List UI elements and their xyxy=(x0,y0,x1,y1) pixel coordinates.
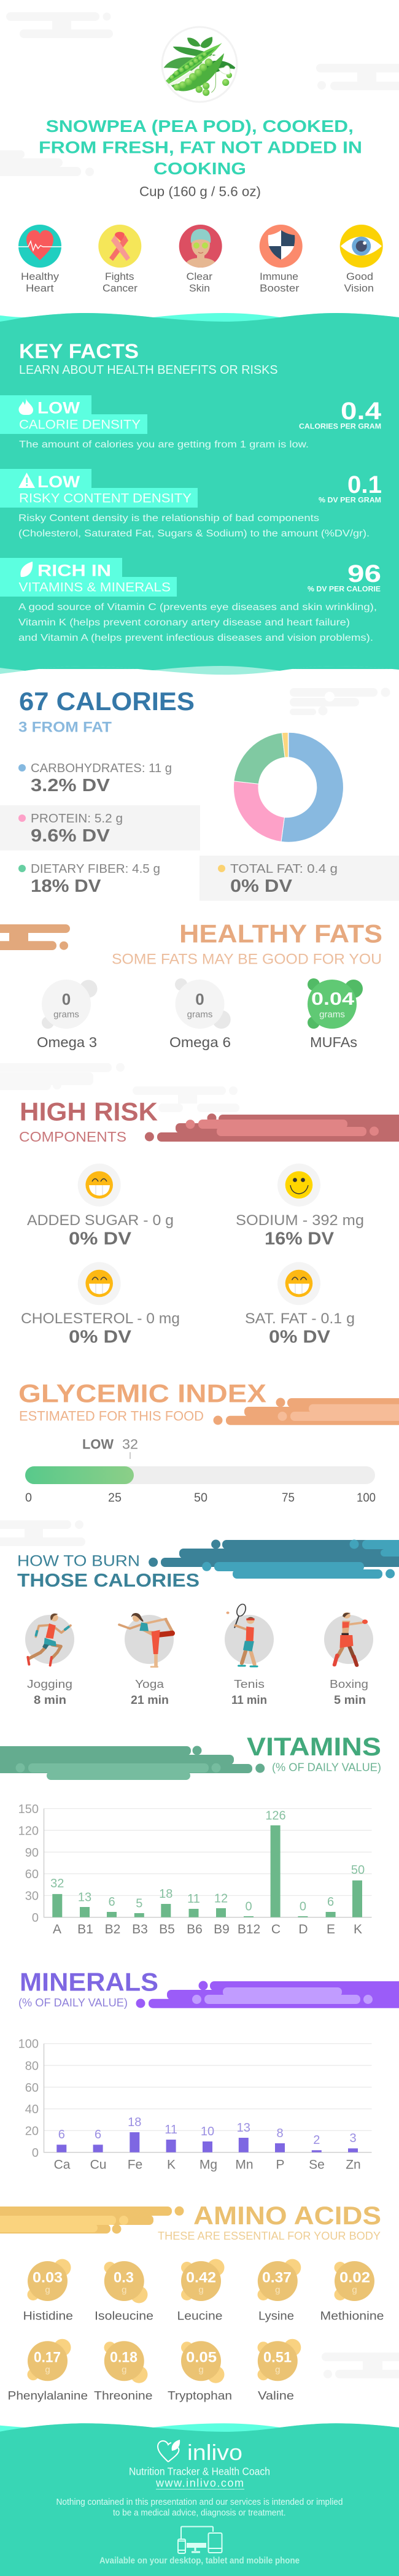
fact: low calorie density: 0.4 xyxy=(341,398,382,425)
amino: lysine: 0.37 xyxy=(262,2269,292,2286)
bar chart: vitamins: K xyxy=(354,1922,362,1936)
amino: leucine: g xyxy=(198,2285,204,2296)
background cloud: amino xyxy=(322,2353,399,2378)
value: low 32: LOW xyxy=(82,1437,114,1452)
bar chart: vitamins: B6 xyxy=(187,1922,203,1936)
stat: dietary fiber xyxy=(18,862,160,896)
heading: how to burn those calories: HOW TO BURN xyxy=(17,1553,140,1570)
amino: phenylalanine: Phenylalanine xyxy=(7,2389,88,2402)
gauge axis labels xyxy=(25,1491,376,1505)
amino: threonine xyxy=(94,2341,152,2402)
bar chart: minerals: P xyxy=(276,2157,285,2172)
logo: inlivo: inlivo xyxy=(187,2440,242,2465)
bar chart: minerals xyxy=(18,2038,372,2172)
amino: lysine xyxy=(258,2259,301,2323)
gauge axis labels: 100 xyxy=(357,1491,376,1505)
risk item: sodium: 16% DV xyxy=(265,1229,335,1248)
amino: phenylalanine: g xyxy=(45,2365,50,2375)
bar chart: vitamins: C xyxy=(271,1922,281,1936)
amino: lysine: g xyxy=(275,2285,280,2296)
bar chart: minerals: 40 xyxy=(25,2103,39,2116)
bar chart: minerals: Mn xyxy=(235,2157,254,2172)
stat: dietary fiber: 18% DV xyxy=(31,876,101,896)
fact: rich in vitamins and minerals: % DV PER CALORIE xyxy=(308,585,381,594)
bar chart: minerals: 13 xyxy=(237,2121,250,2135)
bar chart: vitamins: 150 xyxy=(18,1803,39,1816)
bar chart: vitamins: D xyxy=(298,1922,308,1936)
fact: low risky content density xyxy=(0,469,382,539)
health benefit labels: Good xyxy=(346,271,373,282)
amino: isoleucine xyxy=(95,2261,153,2323)
stat: dietary fiber: DIETARY FIBER: 4.5 g xyxy=(31,862,160,876)
amino: tryptophan xyxy=(168,2341,232,2402)
disclaimer: Nothing contained in this presentation and our services is intended or implied xyxy=(56,2497,343,2507)
activity: boxing: Boxing xyxy=(330,1678,368,1690)
amino: methionine: 0.02 xyxy=(339,2269,370,2286)
activity: yoga: Yoga xyxy=(135,1678,165,1690)
tagline: Nutrition Tracker & Health Coach xyxy=(129,2465,270,2477)
bar chart: minerals: Se xyxy=(309,2157,325,2172)
amino: methionine: Methionine xyxy=(320,2310,384,2323)
risk item: sodium xyxy=(236,1164,364,1248)
fact: rich in vitamins and minerals: A good source of Vitamin C (prevents eye diseases and skin wrinkling), xyxy=(18,602,377,613)
panel: amino acids xyxy=(0,2201,384,2402)
fact: rich in vitamins and minerals: Vitamin K (helps prevent coronary artery disease and heart failure) xyxy=(18,617,350,628)
stat: carbohydrates: 3.2% DV xyxy=(31,776,110,795)
decorative blob: minerals xyxy=(136,1981,399,2008)
heading: minerals: MINERALS xyxy=(20,1967,158,1996)
bar chart: minerals: 0 xyxy=(32,2146,39,2160)
bar chart: minerals: 11 xyxy=(165,2123,177,2137)
bar chart: minerals: Mg xyxy=(200,2157,217,2172)
bar chart: vitamins: 30 xyxy=(25,1890,39,1903)
call to action: Available on your desktop, tablet and mobile phone xyxy=(99,2556,300,2566)
heading: healthy fats: HEALTHY FATS xyxy=(179,919,382,948)
bar chart: vitamins xyxy=(18,1803,372,1936)
subheading: components: COMPONENTS xyxy=(19,1129,126,1145)
activity: tennis xyxy=(225,1603,274,1707)
bubble: omega 6: grams xyxy=(187,1010,212,1020)
title: SNOWPEA (PEA POD), COOKED, xyxy=(46,117,354,136)
amino: leucine xyxy=(177,2259,225,2323)
health benefit labels xyxy=(21,271,374,294)
bubble: MUFAs: MUFAs xyxy=(310,1034,357,1050)
background cloud: burn section xyxy=(0,1520,85,1546)
amino: leucine: Leucine xyxy=(177,2310,222,2323)
bar chart: vitamins: 120 xyxy=(18,1824,39,1838)
bar chart: minerals: Cu xyxy=(90,2157,106,2172)
subheading: from fat: 3 FROM FAT xyxy=(18,719,112,736)
bar chart: vitamins: B5 xyxy=(159,1922,175,1936)
bubble: omega 6 xyxy=(169,978,231,1050)
fact: rich in vitamins and minerals: 96 xyxy=(347,560,381,587)
disclaimer xyxy=(56,2497,343,2518)
title: COOKING xyxy=(153,159,246,178)
bubble: omega 3: grams xyxy=(53,1010,79,1020)
risk item: added sugar: ADDED SUGAR - 0 g xyxy=(27,1212,174,1229)
bar chart: minerals: Zn xyxy=(346,2157,361,2172)
decorative blob: vitamins xyxy=(0,1746,265,1780)
risk item: cholesterol xyxy=(21,1262,180,1347)
fact: low risky content density: 0.1 xyxy=(347,471,382,498)
activity: boxing xyxy=(324,1612,373,1707)
amino: valine: g xyxy=(275,2365,280,2375)
heading: key facts: KEY FACTS xyxy=(19,340,139,363)
fact: low risky content density: RISKY CONTENT DENSITY xyxy=(19,492,192,506)
gauge axis labels: 0 xyxy=(25,1491,32,1505)
amino: threonine: g xyxy=(122,2365,126,2375)
fact: low calorie density: LOW xyxy=(37,399,80,417)
health benefit labels: Fights xyxy=(105,271,134,282)
bar chart: vitamins: E xyxy=(327,1922,335,1936)
decorative blob: healthy fats xyxy=(0,924,70,950)
health benefit labels: Cancer xyxy=(103,282,138,294)
bubble: omega 3 xyxy=(37,980,97,1050)
fact: low calorie density: CALORIE DENSITY xyxy=(19,418,141,432)
amino: lysine: Lysine xyxy=(258,2310,294,2323)
bar chart: minerals: 8 xyxy=(276,2127,284,2140)
panel: high risk components xyxy=(19,1097,399,1347)
bar chart: vitamins: 60 xyxy=(25,1868,39,1881)
stat: protein: 9.6% DV xyxy=(31,826,110,846)
panel: glycemic index xyxy=(18,1379,399,1505)
amino: threonine: 0.18 xyxy=(110,2349,138,2365)
panel: how to burn those calories xyxy=(17,1539,399,1707)
amino: histidine: 0.03 xyxy=(33,2269,63,2286)
bar chart: minerals: 2 xyxy=(313,2133,320,2147)
amino: leucine: 0.42 xyxy=(186,2269,216,2286)
fact: low risky content density: (Cholesterol, Saturated Fat, Sugars & Sodium) to the amount (%DV/gr). xyxy=(18,528,370,539)
amino: isoleucine: 0.3 xyxy=(114,2269,134,2286)
stat: total fat: 0% DV xyxy=(230,876,293,896)
bar chart: vitamins: 5 xyxy=(136,1897,142,1910)
bar chart: vitamins: 50 xyxy=(351,1863,365,1877)
activity: tennis: 11 min xyxy=(231,1694,267,1707)
bar chart: vitamins: 0 xyxy=(300,1900,306,1914)
icon: immune booster shield xyxy=(260,225,303,268)
health benefit labels: Heart xyxy=(26,282,54,294)
gauge axis labels: 75 xyxy=(282,1491,295,1505)
icon: fights cancer ribbon xyxy=(98,225,141,268)
panel: footer xyxy=(0,2423,399,2576)
bar chart: minerals: 100 xyxy=(18,2038,39,2051)
gauge axis labels: 50 xyxy=(194,1491,207,1505)
logo: inlivo xyxy=(158,2440,242,2465)
bar chart: minerals: 6 xyxy=(58,2128,65,2141)
risk item: saturated fat: 0% DV xyxy=(269,1327,331,1347)
bar chart: vitamins: A xyxy=(53,1922,61,1936)
bar chart: vitamins: B12 xyxy=(238,1922,260,1936)
website link: www.inlivo.com xyxy=(155,2477,244,2489)
bar chart: minerals: 6 xyxy=(95,2128,101,2141)
health benefit labels: Clear xyxy=(187,271,212,282)
bar chart: vitamins: 13 xyxy=(78,1890,91,1904)
amino: phenylalanine xyxy=(7,2339,88,2402)
icon: good vision eye xyxy=(340,225,383,268)
fact: rich in vitamins and minerals: and Vitamin A (helps prevent infectious diseases and vision problems). xyxy=(18,633,373,643)
stat: protein: PROTEIN: 5.2 g xyxy=(31,812,123,826)
bar chart: minerals: 80 xyxy=(25,2059,39,2073)
stat: carbohydrates xyxy=(18,762,172,795)
bar chart: minerals: 60 xyxy=(25,2081,39,2095)
bar chart: minerals: 20 xyxy=(25,2125,39,2138)
title: FROM FRESH, FAT NOT ADDED IN xyxy=(39,138,362,157)
fact: low risky content density: Risky Content density is the relationship of bad components xyxy=(18,513,319,524)
subheading: LEARN ABOUT HEALTH BENEFITS OR RISKS xyxy=(19,363,277,377)
amino: isoleucine: Isoleucine xyxy=(95,2310,153,2323)
panel: healthy fats xyxy=(0,919,382,1050)
serving size: Cup (160 g / 5.6 oz) xyxy=(139,184,261,199)
stat: protein xyxy=(18,812,123,846)
gauge bar xyxy=(25,1466,375,1484)
bar chart: minerals: 18 xyxy=(128,2116,141,2129)
bar chart: vitamins: 32 xyxy=(50,1877,64,1890)
bar chart: vitamins: 90 xyxy=(25,1846,39,1860)
bar chart: vitamins: 126 xyxy=(265,1809,286,1822)
subheading: (% OF DAILY VALUE) xyxy=(272,1761,381,1774)
bar chart: vitamins: 6 xyxy=(108,1895,115,1909)
bar chart: minerals: 3 xyxy=(349,2132,357,2145)
value: low 32 xyxy=(82,1437,138,1459)
food photo: snow pea pods xyxy=(162,27,237,102)
activity: yoga xyxy=(119,1613,174,1707)
bubble: omega 3: 0 xyxy=(62,990,71,1008)
amino: valine xyxy=(258,2339,301,2402)
subheading: SOME FATS MAY BE GOOD FOR YOU xyxy=(112,951,382,968)
fact: rich in vitamins and minerals xyxy=(0,558,381,643)
donut chart: macronutrients xyxy=(233,732,343,842)
health benefits row xyxy=(18,225,383,294)
amino: methionine: g xyxy=(352,2285,357,2296)
amino: phenylalanine: 0.17 xyxy=(34,2349,61,2365)
risk item: cholesterol: CHOLESTEROL - 0 mg xyxy=(21,1310,180,1327)
risk item: added sugar xyxy=(27,1164,174,1248)
risk item: saturated fat: SAT. FAT - 0.1 g xyxy=(245,1310,355,1327)
fact: low calorie density xyxy=(0,395,382,450)
icon: healthy heart xyxy=(18,225,61,268)
fact: low calorie density: The amount of calories you are getting from 1 gram is low. xyxy=(19,439,309,450)
heading: amino acids: AMINO ACIDS xyxy=(193,2201,381,2230)
stat: carbohydrates: CARBOHYDRATES: 11 g xyxy=(31,762,172,775)
subheading: ESTIMATED FOR THIS FOOD xyxy=(19,1408,204,1423)
risk item: saturated fat xyxy=(245,1262,355,1347)
amino: threonine: Threonine xyxy=(94,2389,152,2402)
activity: yoga: 21 min xyxy=(131,1694,169,1707)
bar chart: minerals: Fe xyxy=(128,2157,142,2172)
panel: key facts xyxy=(0,313,399,675)
background clouds: header xyxy=(0,12,399,176)
decorative blob: glycemic xyxy=(214,1398,399,1425)
stat: total fat: TOTAL FAT: 0.4 g xyxy=(230,862,338,876)
risk item: added sugar: 0% DV xyxy=(69,1229,132,1248)
bar chart: vitamins: B3 xyxy=(132,1922,148,1936)
health benefit labels: Healthy xyxy=(21,271,60,282)
bar chart: minerals: 10 xyxy=(201,2125,214,2138)
amino: valine: Valine xyxy=(258,2389,294,2402)
activity: jogging xyxy=(25,1614,74,1707)
heading: vitamins: VITAMINS xyxy=(247,1732,381,1761)
bubble: omega 3: Omega 3 xyxy=(37,1034,97,1050)
bar chart: minerals: Ca xyxy=(54,2157,71,2172)
amino: methionine xyxy=(320,2261,384,2323)
health benefit labels: Immune xyxy=(260,271,298,282)
fact: rich in vitamins and minerals: RICH IN xyxy=(37,562,111,580)
bubble: omega 6: 0 xyxy=(195,990,204,1008)
value: low 32: 32 xyxy=(122,1437,138,1452)
bar chart: vitamins: B2 xyxy=(105,1922,120,1936)
decorative blob: amino xyxy=(0,2207,184,2234)
title xyxy=(39,117,362,178)
bar chart: vitamins: 0 xyxy=(245,1900,252,1914)
bar chart: minerals: K xyxy=(167,2157,176,2172)
health benefit labels: Skin xyxy=(189,282,210,294)
activity: jogging: Jogging xyxy=(27,1678,72,1690)
bubble: omega 6: Omega 6 xyxy=(169,1034,231,1050)
bar chart: vitamins: 18 xyxy=(159,1887,172,1901)
heading: 67 calories: 67 CALORIES xyxy=(19,687,195,716)
bar chart: vitamins: B9 xyxy=(214,1922,230,1936)
background clouds: between fats and risk xyxy=(0,1063,239,1112)
panel: calories xyxy=(0,687,399,901)
health benefit labels: Booster xyxy=(260,282,300,294)
fact: low calorie density: CALORIES PER GRAM xyxy=(299,422,381,431)
panel: vitamins xyxy=(0,1732,381,1936)
heading: high risk: HIGH RISK xyxy=(20,1097,158,1126)
bubble: MUFAs: 0.04 xyxy=(311,989,354,1009)
bar chart: vitamins: 12 xyxy=(214,1892,228,1905)
decorative blob: burn xyxy=(149,1539,399,1579)
subheading: THESE ARE ESSENTIAL FOR YOUR BODY xyxy=(158,2230,381,2242)
fact: low risky content density: LOW xyxy=(37,473,80,491)
heading: glycemic index: GLYCEMIC INDEX xyxy=(18,1379,266,1407)
bar chart: vitamins: B1 xyxy=(77,1922,93,1936)
activity: jogging: 8 min xyxy=(34,1694,66,1707)
fact: rich in vitamins and minerals: VITAMINS & MINERALS xyxy=(18,581,171,595)
subheading: (% OF DAILY VALUE) xyxy=(18,1996,128,2009)
bubble: MUFAs: grams xyxy=(319,1010,345,1020)
heading: how to burn those calories xyxy=(17,1553,200,1591)
bar chart: vitamins: 6 xyxy=(327,1895,334,1909)
heading: how to burn those calories: THOSE CALORIES xyxy=(17,1569,200,1591)
icon: devices xyxy=(178,2526,222,2553)
amino: histidine: Histidine xyxy=(23,2310,73,2323)
fact: low risky content density: % DV PER GRAM xyxy=(319,496,381,505)
icon: clear skin face xyxy=(179,225,222,270)
amino: tryptophan: 0.05 xyxy=(186,2349,217,2365)
activity: tennis: Tenis xyxy=(234,1678,265,1690)
amino: valine: 0.51 xyxy=(263,2349,292,2365)
decorative blob: high risk xyxy=(145,1113,399,1142)
stat: total fat xyxy=(218,862,338,896)
bubble: MUFAs xyxy=(308,978,363,1050)
risk item: cholesterol: 0% DV xyxy=(69,1327,132,1347)
disclaimer: to be a medical advice, diagnosis or treatment. xyxy=(113,2507,286,2518)
risk item: sodium: SODIUM - 392 mg xyxy=(236,1212,364,1229)
amino: histidine: g xyxy=(45,2285,50,2296)
gauge axis labels: 25 xyxy=(108,1491,122,1505)
amino: histidine xyxy=(23,2259,73,2323)
health benefit labels: Vision xyxy=(344,282,374,294)
amino: tryptophan: g xyxy=(198,2365,204,2375)
panel: minerals xyxy=(18,1967,399,2172)
amino: isoleucine: g xyxy=(122,2285,126,2296)
bar chart: vitamins: 0 xyxy=(32,1911,39,1925)
amino: tryptophan: Tryptophan xyxy=(168,2389,232,2402)
bar chart: vitamins: 11 xyxy=(187,1892,200,1906)
activity: boxing: 5 min xyxy=(334,1694,366,1707)
